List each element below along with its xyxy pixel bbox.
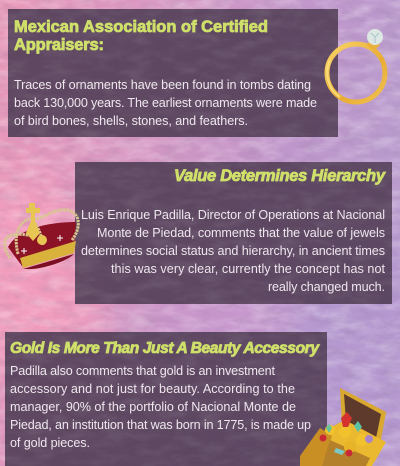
text block: Padilla on hierarchy: really changed much. (268, 280, 385, 294)
text block: gold as investment: manager, 90% of the portfolio of Nacional Monte de (10, 400, 296, 414)
icon: gold ring (327, 29, 385, 102)
text block: Padilla on hierarchy: Luis Enrique Padilla, Director of Operations at Nacional (81, 208, 385, 222)
heading: Mexican Association: Mexican Association of Certified (14, 18, 268, 36)
text block: ornaments: of bird bones, shells, stones, and feathers. (14, 114, 248, 128)
heading: Gold Is More: Gold Is More Than Just A Beauty Accessory (10, 340, 320, 357)
text block: Padilla on hierarchy: determines social status and hierarchy, in ancient times (81, 244, 385, 258)
icon: royal crown (5, 203, 78, 269)
text block: gold as investment: Piedad, an institution that was born in 1775, is made up (10, 418, 311, 432)
icon: treasure chest (300, 388, 386, 466)
text block: ornaments: back 130,000 years. The earliest ornaments were made (14, 96, 317, 110)
text block: gold as investment: accessory and not just for beauty. According to the (10, 382, 295, 396)
text block: ornaments: Traces of ornaments have been found in tombs dating (14, 78, 311, 92)
text block: Padilla on hierarchy: this was very clear, currently the concept has not (111, 262, 386, 276)
text block: gold as investment: of gold pieces. (10, 436, 90, 450)
panel: Value Determines Hierarchy (75, 162, 392, 304)
panel: Gold Is More Than Just A Beauty Accessory (5, 332, 327, 466)
heading: Value Determines Hierarchy: Value Determines Hierarchy (174, 167, 386, 185)
text block: Padilla on hierarchy: Monte de Piedad, comments that the value of jewels (97, 226, 385, 240)
text block: gold as investment: Padilla also comments that gold is an investment (10, 364, 276, 378)
heading: Mexican Association: Appraisers: (14, 36, 104, 54)
panel: Mexican Association of Certified Appraisers (8, 9, 338, 137)
